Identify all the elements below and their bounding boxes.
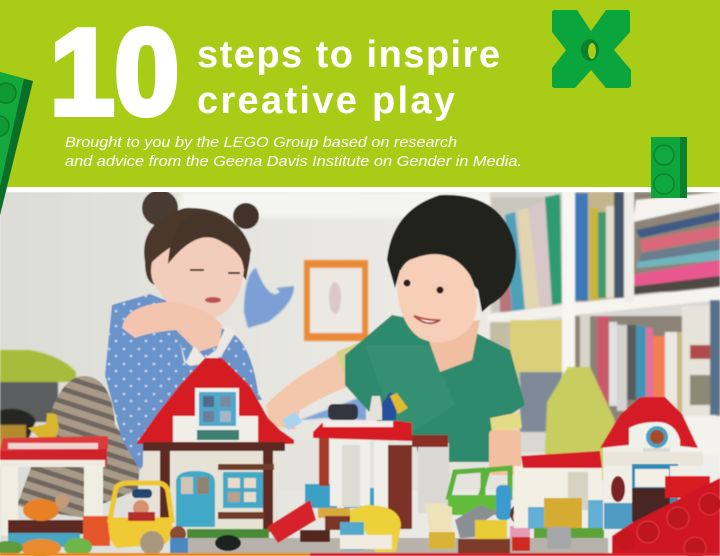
green cross brick — [552, 10, 631, 88]
header band — [0, 0, 720, 192]
barn with red roof — [600, 397, 710, 530]
wall art: whale and orange frame — [244, 260, 368, 420]
brick in boy's hand — [282, 412, 302, 430]
boy near arm — [489, 430, 521, 475]
subtitle: Brought to you by the LEGO Group based on research — [65, 134, 457, 151]
brick farmhouse, centre left — [136, 358, 294, 539]
girl legs, striped trousers — [17, 376, 140, 520]
girl arm — [122, 302, 222, 352]
small items and fence near boat — [300, 505, 401, 552]
title text: steps to inspire — [197, 34, 500, 76]
girl fringe — [168, 224, 252, 264]
boy far arm — [266, 352, 352, 430]
green cart and animals group — [425, 468, 530, 554]
boy neck — [425, 320, 480, 372]
girl dress — [105, 294, 262, 470]
barn crest — [629, 422, 680, 448]
bookshelf — [488, 192, 720, 456]
title number 10: 10 — [50, 4, 179, 140]
farmhouse window with flower box — [195, 388, 239, 442]
farmhouse walls — [142, 450, 278, 536]
boy face — [397, 254, 477, 342]
figure in pink — [510, 504, 530, 551]
toy horse in girl's hand — [180, 326, 236, 366]
title text: creative play — [197, 80, 455, 122]
tractor toy at left — [0, 350, 76, 450]
photo bottom edge — [0, 553, 720, 556]
red boat toy — [267, 500, 316, 543]
ground — [188, 538, 608, 554]
room background wall — [0, 192, 720, 556]
girl face — [151, 232, 244, 320]
girl — [17, 190, 262, 520]
boy — [266, 195, 525, 475]
small black toy — [328, 404, 358, 420]
farmhouse door — [176, 471, 215, 527]
farmhouse roof — [136, 358, 294, 444]
farmhouse lower window — [223, 472, 263, 508]
girl hair and buns — [142, 190, 259, 285]
green small brick, right — [651, 137, 687, 198]
large red brick, foreground — [612, 478, 720, 556]
yellow toy car with driver — [108, 483, 190, 555]
small yellow duck — [28, 413, 59, 440]
left shelter with red roof — [0, 436, 110, 556]
boy shirt — [345, 315, 525, 462]
subtitle: and advice from the Geena Davis Institute on Gender in Media. — [65, 153, 522, 170]
central red roofed shelter with birds — [282, 392, 449, 529]
black toy on floor — [215, 535, 241, 551]
green brick, left edge — [0, 72, 33, 215]
parrots — [368, 392, 408, 420]
yellow-green toy house behind — [545, 367, 615, 480]
stable with red roof — [514, 451, 604, 549]
boy hair — [387, 195, 516, 312]
lantern badge — [611, 476, 625, 502]
photo: children playing with bricks — [0, 190, 720, 556]
